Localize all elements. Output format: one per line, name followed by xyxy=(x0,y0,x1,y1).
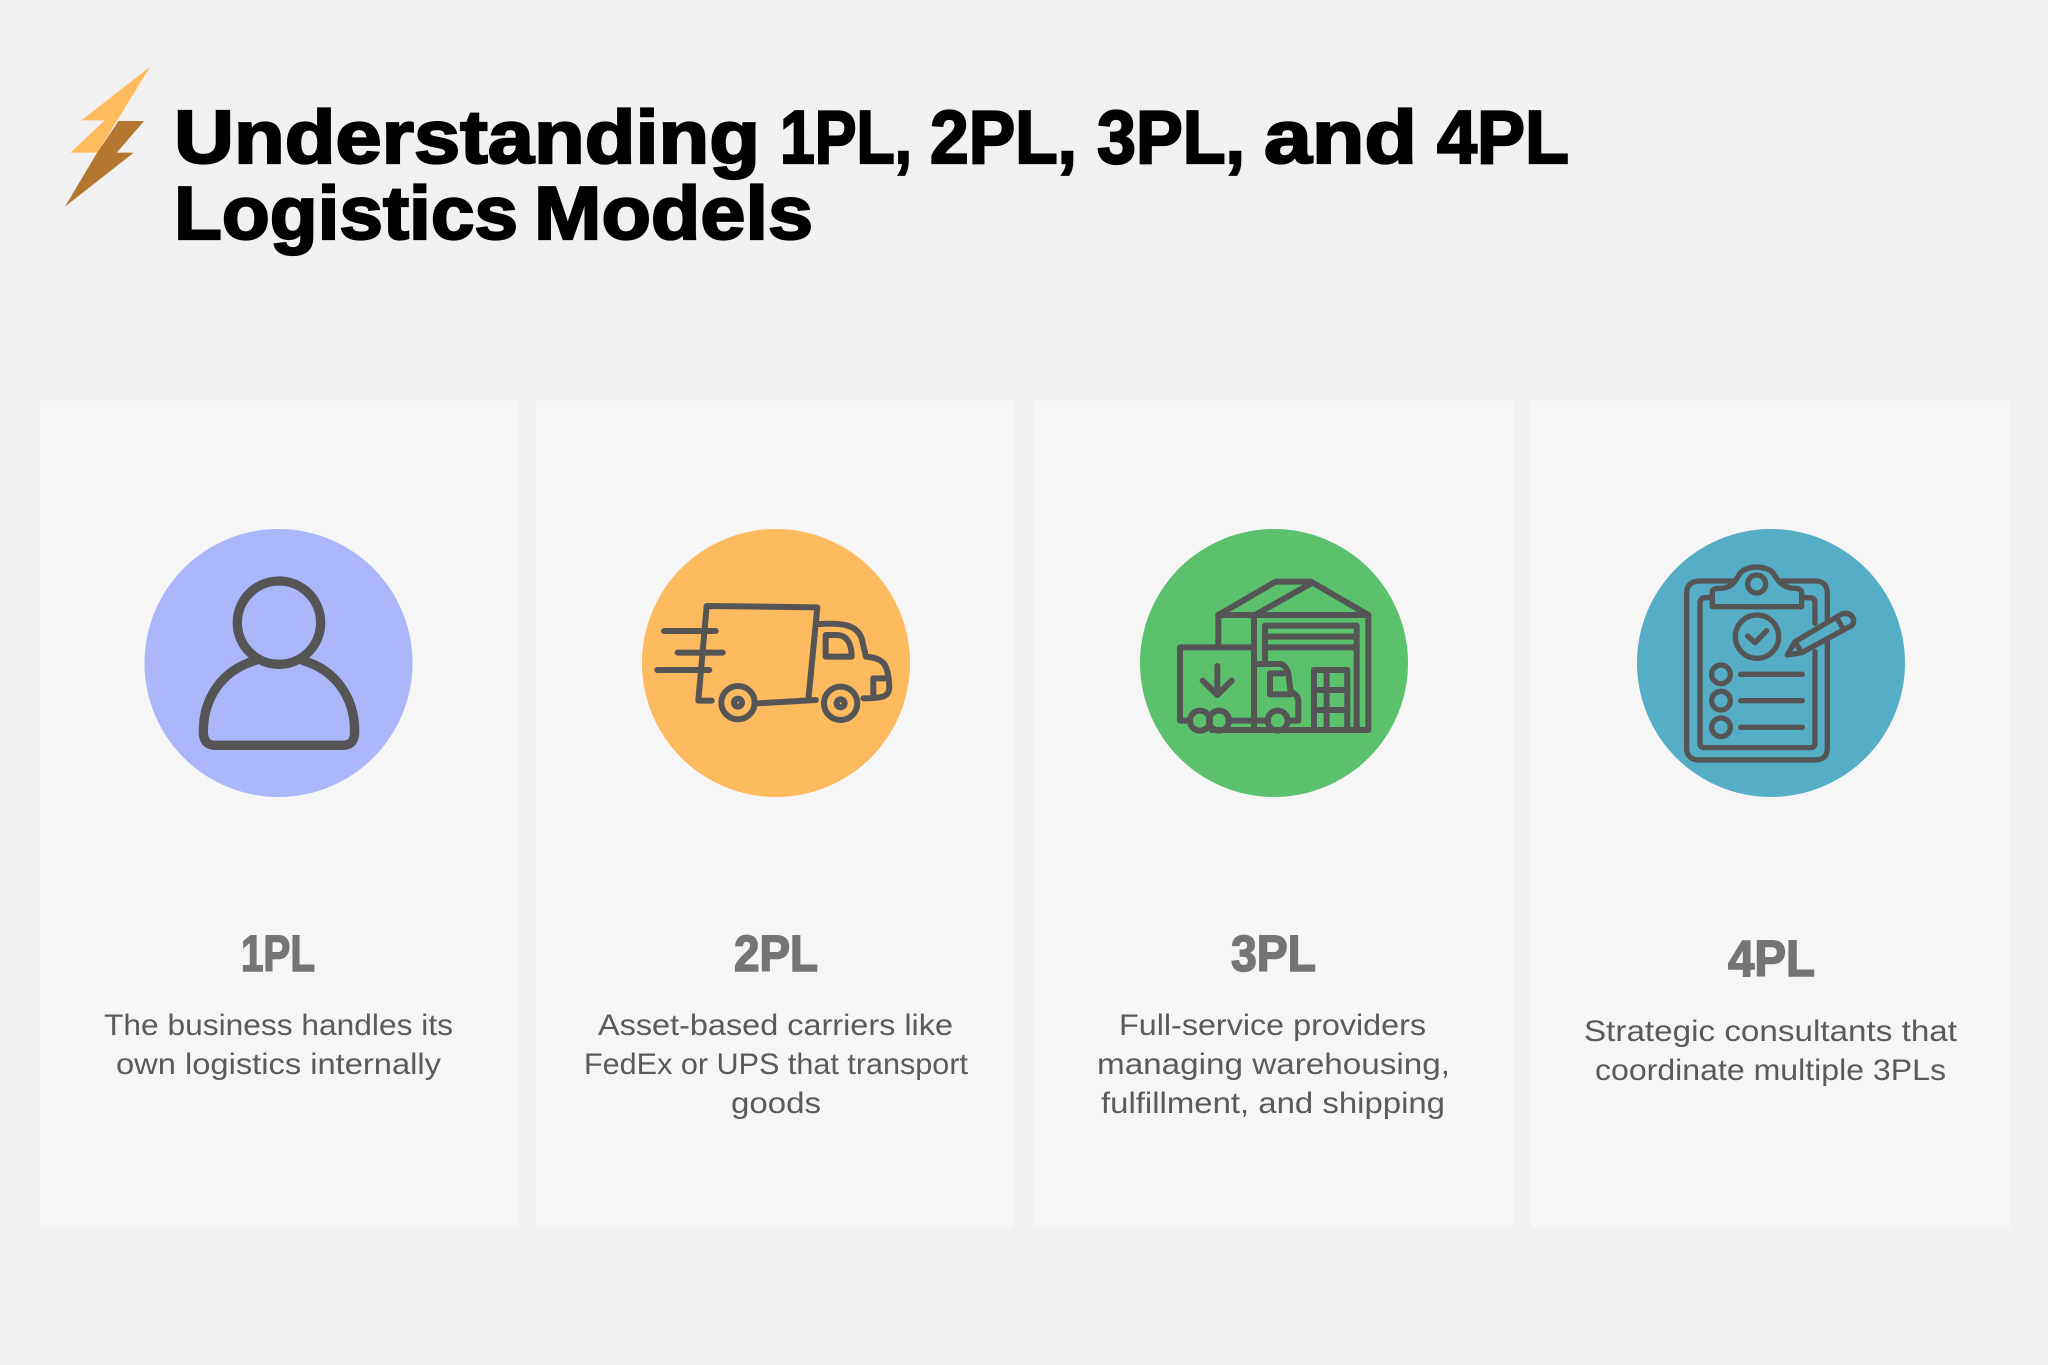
heading: 1PL: 1PL xyxy=(241,925,315,982)
icon: clipboard checklist xyxy=(1637,529,1905,797)
text: 3PL description xyxy=(1097,1009,1450,1120)
title: 1PL, xyxy=(780,95,912,179)
text: 3PL description: managing warehousing, xyxy=(1097,1048,1450,1081)
title: Logistics xyxy=(174,171,518,255)
text: 3PL description: Full-service providers xyxy=(1119,1009,1426,1042)
text: 4PL description: Strategic consultants that xyxy=(1584,1015,1958,1048)
text: 3PL description: fulfillment, and shipping xyxy=(1101,1087,1445,1120)
text: 1PL description: The business handles its xyxy=(104,1009,453,1042)
panel: 1PL xyxy=(40,401,519,1228)
text: 2PL description: goods xyxy=(731,1087,821,1120)
panel: 2PL xyxy=(536,401,1014,1228)
title: Models xyxy=(534,171,813,255)
panel: 3PL xyxy=(1033,401,1513,1228)
text: 2PL description: Asset-based carriers like xyxy=(598,1009,953,1042)
panel: 4PL xyxy=(1531,401,2010,1228)
icon: warehouse with truck xyxy=(1140,529,1408,797)
text: 1PL description: own logistics internally xyxy=(116,1048,441,1081)
heading: 3PL: 3PL xyxy=(1231,925,1316,982)
heading: 4PL: 4PL xyxy=(1728,930,1815,987)
title: 3PL, xyxy=(1097,95,1245,179)
icon: delivery truck xyxy=(642,529,910,797)
icon: person xyxy=(144,529,412,797)
heading: 2PL: 2PL xyxy=(734,925,818,982)
icon: lightning bolt xyxy=(65,67,150,207)
text: 2PL description: FedEx or UPS that transport xyxy=(584,1048,969,1081)
text: 4PL description: coordinate multiple 3PLs xyxy=(1595,1054,1946,1087)
title: 2PL, xyxy=(930,95,1077,179)
text: 2PL description xyxy=(584,1009,969,1120)
text: 4PL description xyxy=(1584,1015,1958,1087)
title: 4PL xyxy=(1437,95,1569,179)
title: and xyxy=(1264,95,1417,179)
text: 1PL description xyxy=(104,1009,453,1081)
title: Understanding xyxy=(174,95,760,179)
title xyxy=(174,95,1569,255)
